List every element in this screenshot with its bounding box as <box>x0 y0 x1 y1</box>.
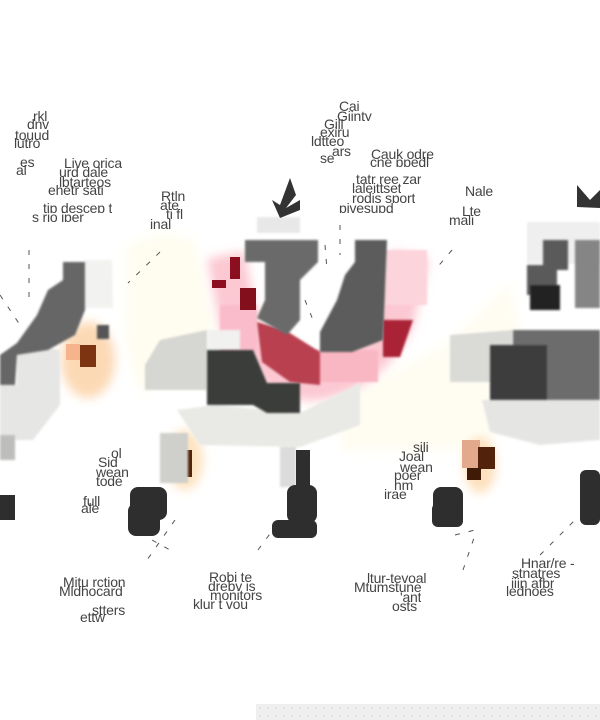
leaves <box>272 178 600 218</box>
orange ears and legs <box>61 322 496 493</box>
pink band <box>212 250 427 385</box>
dashed leader lines <box>0 225 575 570</box>
dotted footer strip <box>256 704 600 720</box>
black wheels <box>0 450 600 538</box>
cream body <box>125 234 520 452</box>
dark grey wool <box>0 240 600 413</box>
light grey fleece <box>0 217 600 487</box>
